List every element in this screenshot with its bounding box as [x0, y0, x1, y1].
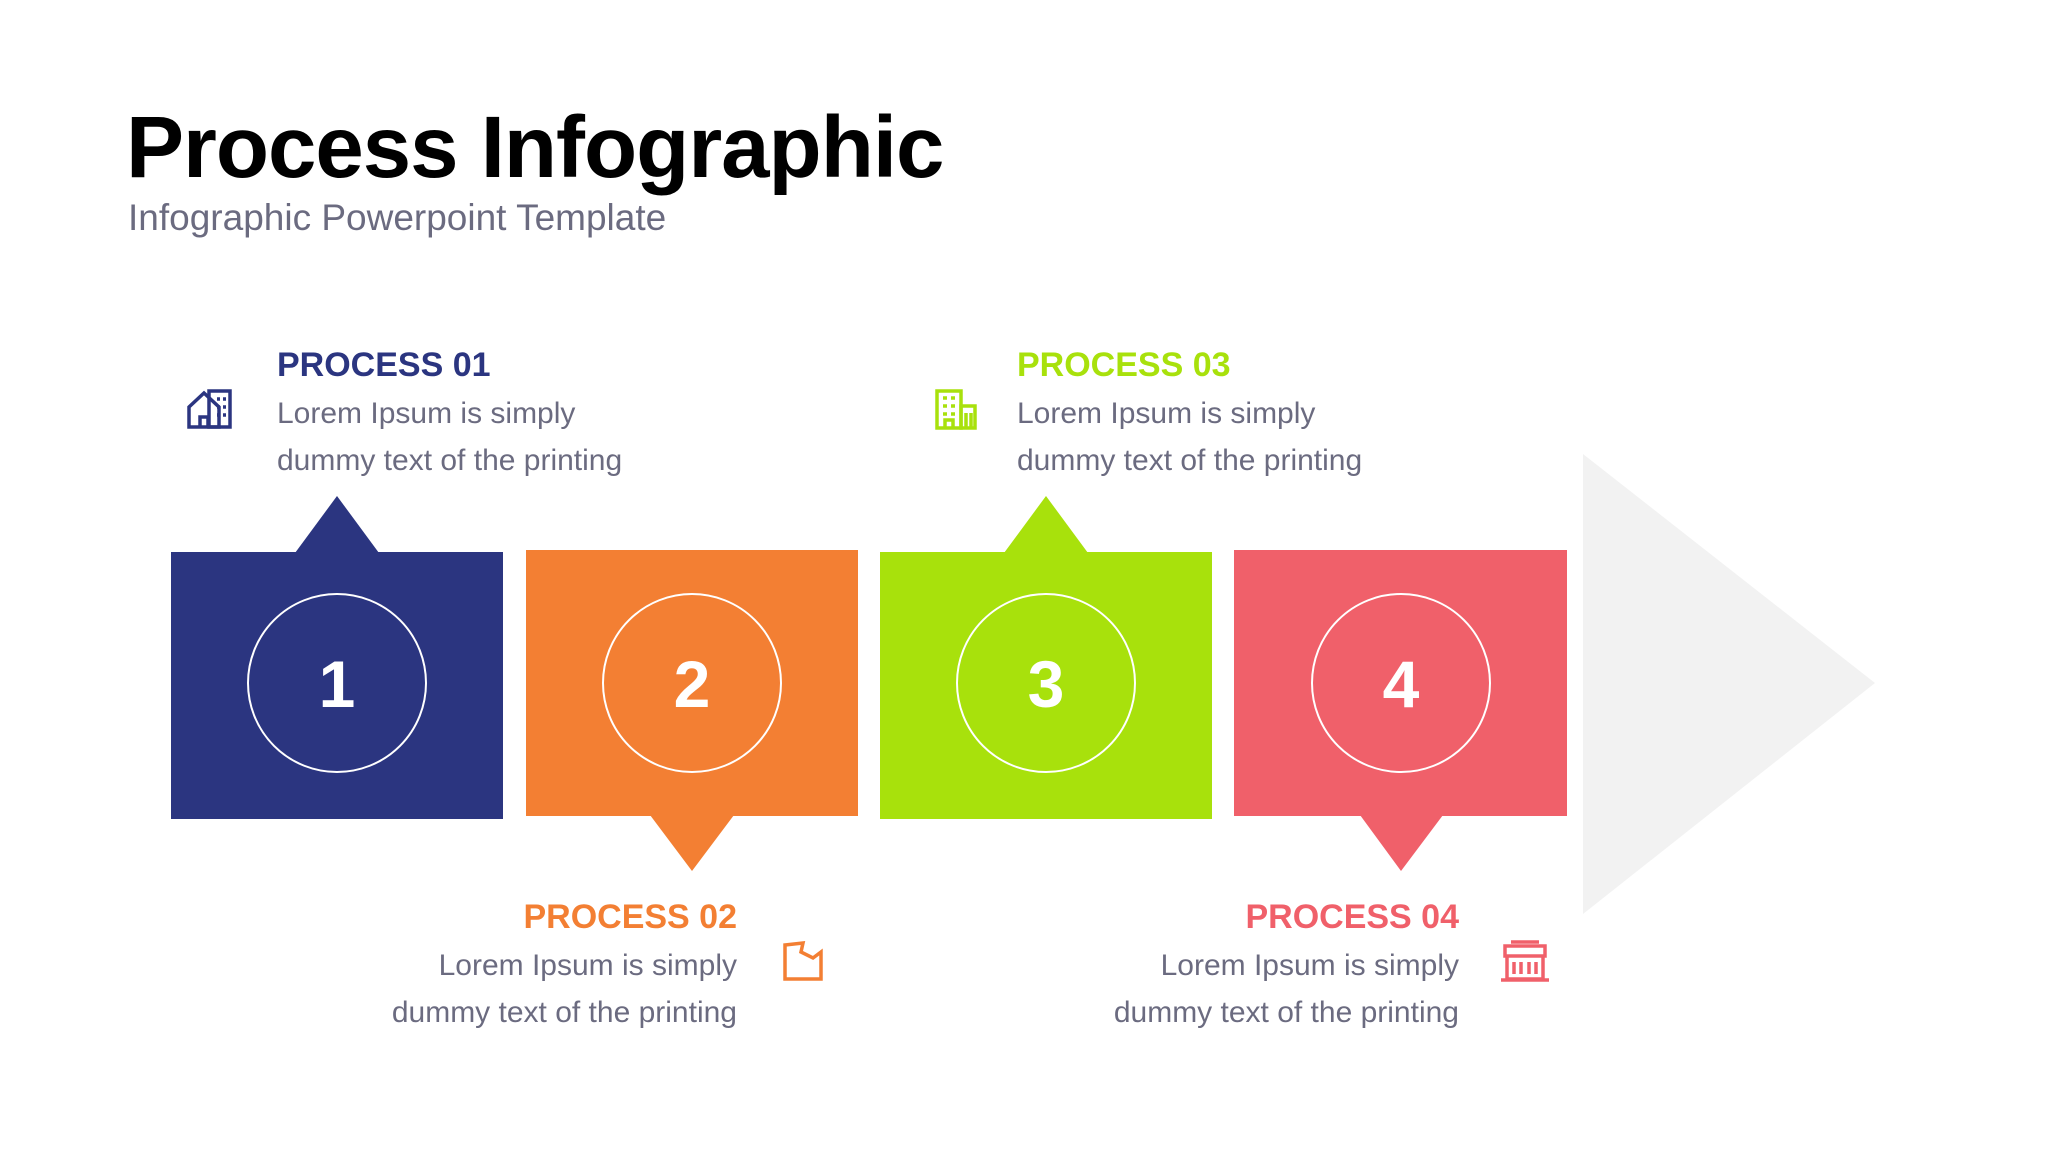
step 2 box [526, 550, 858, 871]
text: process 02: PROCESS 02 [523, 898, 737, 936]
step 3 box [880, 496, 1212, 819]
text: process 04: dummy text of the printing [1114, 996, 1459, 1029]
text: process 01: Lorem Ipsum is simply [277, 397, 575, 430]
text: process 02: dummy text of the printing [392, 996, 737, 1029]
text: process 02: Lorem Ipsum is simply [439, 949, 737, 982]
icon: building 2 [785, 943, 821, 979]
step 1 box [171, 496, 503, 819]
icon: building 1 [189, 391, 230, 427]
text: process 01 [277, 346, 622, 477]
text: process 03: PROCESS 03 [1017, 346, 1231, 384]
text: process 03: Lorem Ipsum is simply [1017, 397, 1315, 430]
text: process 03 [1017, 346, 1362, 477]
step 2 box: 2 [674, 647, 710, 721]
text: process 02 [392, 898, 737, 1029]
icon: bank 4 [1501, 942, 1549, 980]
step 1 box: 1 [319, 647, 355, 721]
text: process 04: PROCESS 04 [1245, 898, 1459, 936]
icon: building 3 [937, 391, 975, 428]
step 4 box: 4 [1383, 647, 1420, 721]
text: process 04: Lorem Ipsum is simply [1161, 949, 1459, 982]
text: process 01: PROCESS 01 [277, 346, 491, 384]
step 3 box: 3 [1028, 647, 1064, 721]
arrow: grey background [1583, 454, 1875, 914]
step 4 box [1234, 550, 1567, 871]
text: process 03: dummy text of the printing [1017, 444, 1362, 477]
subtitle: Infographic Powerpoint Template [128, 197, 666, 238]
text: process 01: dummy text of the printing [277, 444, 622, 477]
title: Process Infographic [126, 99, 943, 196]
text: process 04 [1114, 898, 1459, 1029]
